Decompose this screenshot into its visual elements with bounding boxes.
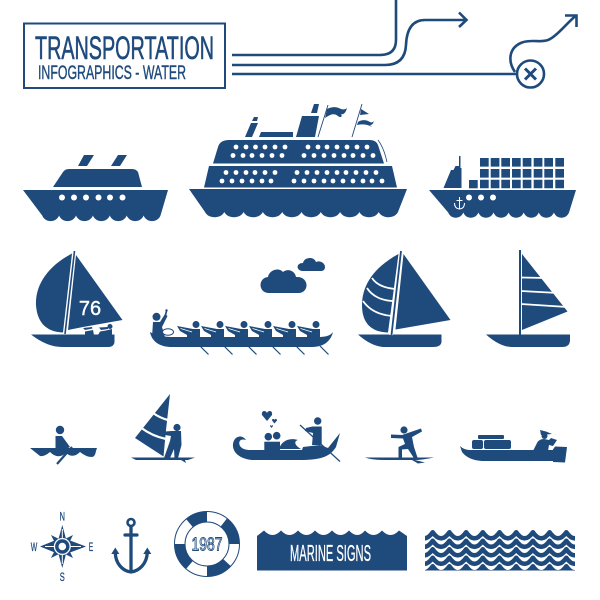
life ring	[174, 512, 240, 576]
marine signs banner: MARINE SIGNS	[290, 540, 371, 566]
compass rose: W	[31, 540, 38, 554]
title: TRANSPORTATION	[35, 30, 214, 66]
compass rose: N	[60, 510, 65, 524]
boatman	[533, 430, 557, 451]
gondola with couple	[233, 411, 340, 462]
flags	[318, 104, 374, 137]
rowers	[177, 321, 328, 354]
cargo	[472, 435, 511, 449]
compass rose: S	[60, 570, 65, 584]
windsurfer	[131, 394, 195, 463]
drummer	[152, 309, 174, 337]
gondolier	[314, 417, 321, 425]
dragon boat	[150, 309, 333, 354]
anchor	[111, 519, 151, 572]
compass rose: E	[89, 540, 93, 554]
sail number: 76	[79, 298, 101, 320]
compass rose	[31, 510, 93, 584]
wave pattern	[416, 532, 583, 572]
container ship	[429, 156, 576, 218]
year: 1987	[192, 534, 222, 554]
title box	[24, 24, 225, 88]
marine signs banner	[257, 530, 407, 570]
striped jib sailboat	[486, 250, 570, 347]
clouds	[260, 258, 325, 293]
small cruise ship	[23, 155, 168, 221]
large cruise ship	[189, 104, 407, 217]
wave cover	[279, 439, 301, 449]
hull anchor	[454, 197, 464, 209]
motor	[552, 446, 567, 462]
surfer	[365, 426, 434, 464]
hearts	[262, 411, 277, 428]
striped spinnaker sailboat	[358, 251, 450, 347]
couple	[264, 432, 281, 450]
subtitle: INFOGRAPHICS - WATER	[38, 62, 186, 84]
cross marker	[517, 60, 544, 88]
sailboat 76	[31, 251, 122, 347]
rowboat	[30, 426, 97, 464]
route lines with arrows	[232, 0, 576, 88]
cargo boat	[460, 430, 567, 462]
crew	[83, 324, 112, 335]
